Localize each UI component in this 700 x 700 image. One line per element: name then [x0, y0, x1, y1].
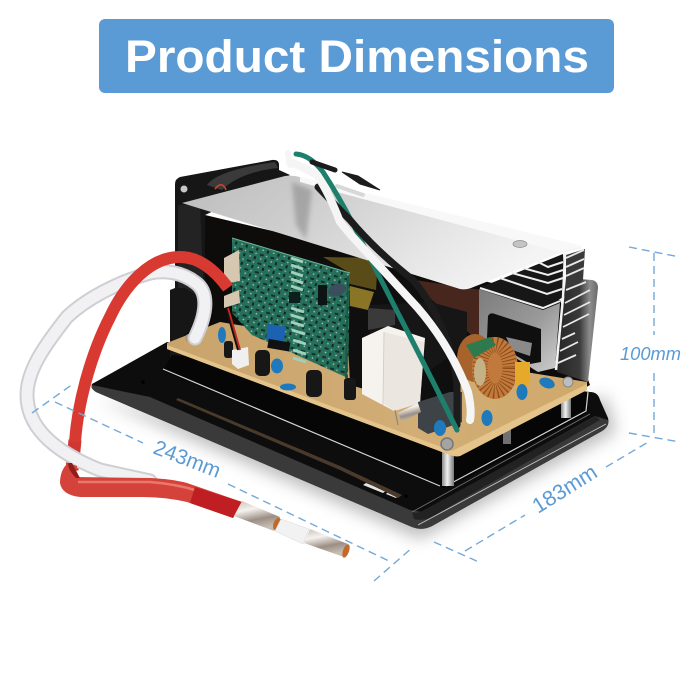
red cable ferrule — [234, 501, 283, 531]
green control board — [232, 238, 350, 378]
red cable lower section behind white cable — [72, 440, 75, 470]
white connector — [232, 347, 249, 369]
fan and back panel — [170, 160, 290, 367]
top cover plate — [182, 176, 583, 289]
power module and transformer — [300, 255, 481, 405]
silver resistor — [395, 403, 421, 425]
white cable — [27, 272, 205, 481]
gray choke block — [418, 392, 462, 434]
red cable arc — [75, 257, 228, 442]
base plate shadow — [96, 396, 616, 539]
red cable flat end — [60, 463, 242, 518]
label: 100mm: 100mm — [620, 343, 681, 364]
label: 243mm: 243mm — [150, 436, 224, 483]
title banner: Product Dimensions — [125, 31, 589, 82]
board connectors — [224, 250, 240, 350]
dimension: 100mm height — [629, 247, 680, 442]
yellow capacitor — [515, 362, 530, 386]
circuit board — [167, 322, 587, 456]
electrolytic capacitors — [224, 341, 356, 400]
toroid coil — [457, 334, 518, 399]
dimension: 243mm length — [32, 384, 413, 581]
base plate — [92, 342, 608, 529]
title banner — [99, 19, 614, 93]
blue ceramic capacitors — [218, 327, 556, 436]
white cable sleeve and ferrule — [275, 519, 351, 559]
chassis interior — [170, 215, 590, 470]
heat sink — [479, 249, 598, 382]
lower chassis tray and standoffs — [163, 355, 588, 488]
label: 183mm: 183mm — [528, 460, 601, 518]
AC wires — [288, 153, 471, 430]
dimension: 183mm width — [434, 441, 650, 563]
filter capacitor block — [362, 326, 425, 411]
